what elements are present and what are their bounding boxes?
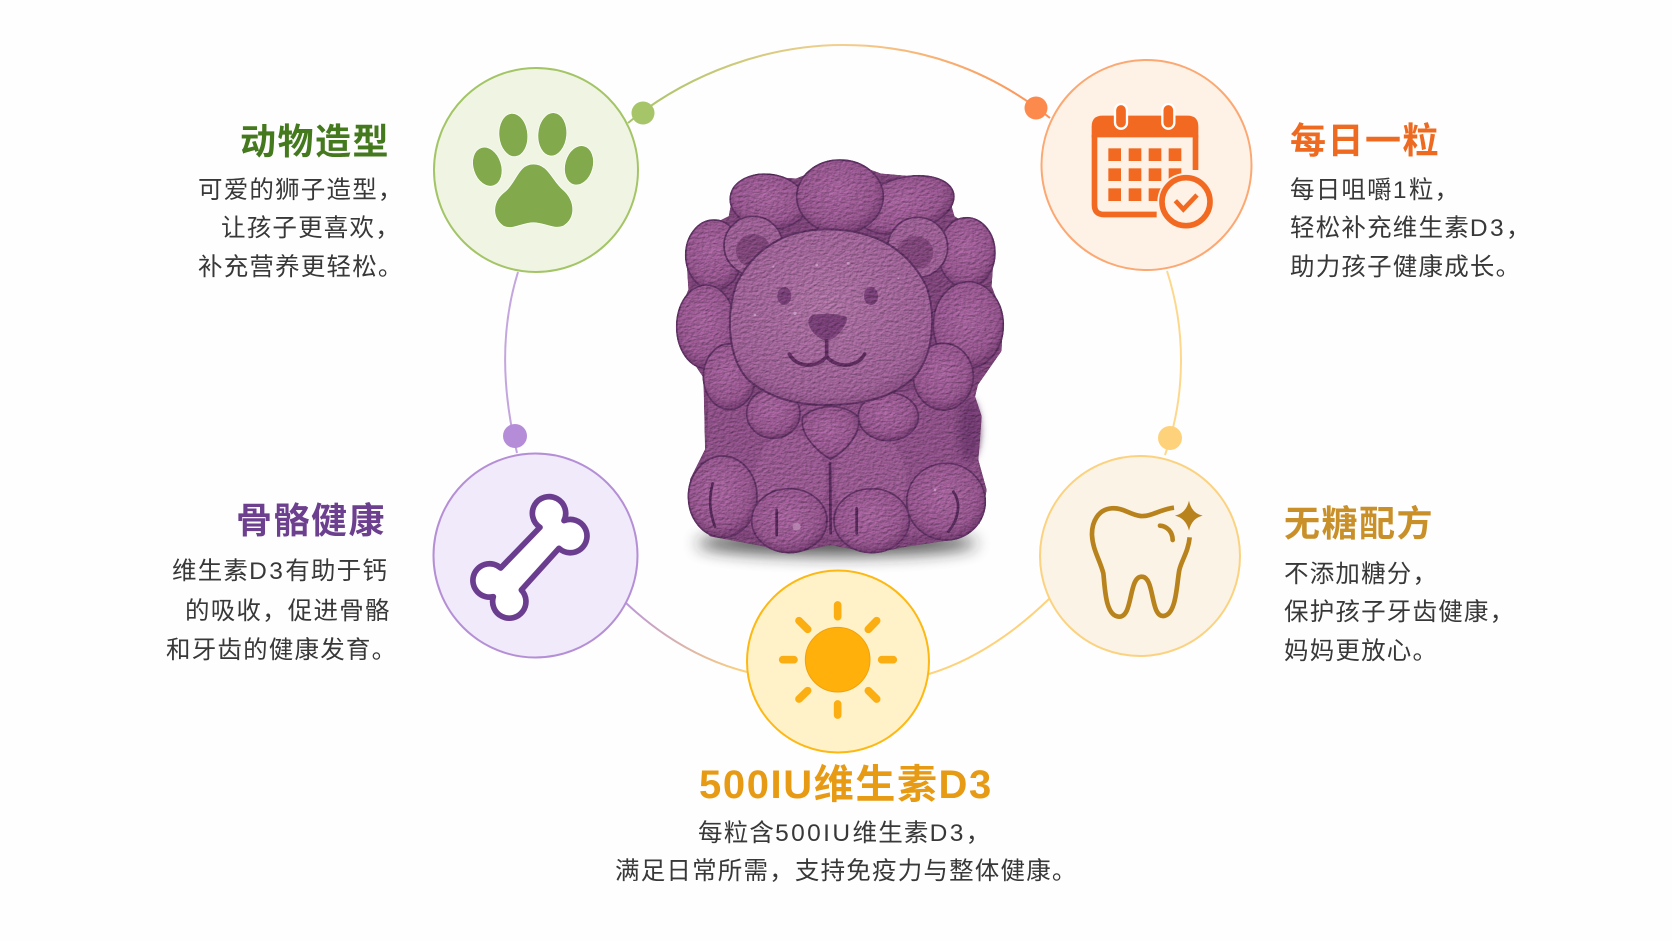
text block: 动物造型: 可爱的狮子造型， <box>198 177 404 204</box>
text block: 500IU维生素D3 <box>615 763 1078 885</box>
heading: 500IU维生素D3: 500IU维生素D3 <box>699 763 993 807</box>
feature circle: calendar <box>1042 60 1252 270</box>
heading: 每日一粒: 每日一粒 <box>1290 120 1440 161</box>
feature circle: tooth <box>1040 456 1240 656</box>
text block: 每日一粒: 轻松补充维生素D3， <box>1290 215 1532 242</box>
icon: calendar with check <box>1092 104 1215 230</box>
icon: tooth with sparkle <box>1092 501 1203 617</box>
feature circle: bone <box>434 454 638 658</box>
text block: 每日一粒 <box>1290 120 1532 281</box>
product image: purple lion tablet <box>677 160 1003 556</box>
feature circle: sun <box>747 570 929 752</box>
heading: 动物造型: 动物造型 <box>240 121 390 162</box>
heading: 无糖配方: 无糖配方 <box>1284 503 1434 544</box>
text block: 每日一粒: 每日咀嚼1粒， <box>1290 177 1460 204</box>
lion ground shadow <box>697 531 977 556</box>
text block: 动物造型 <box>198 121 404 281</box>
connector dot: yellow <box>1158 426 1182 450</box>
text block: 无糖配方: 妈妈更放心。 <box>1284 638 1438 665</box>
text block: 骨骼健康: 维生素D3有助于钙 <box>172 558 388 585</box>
feature circle: paw <box>434 68 638 272</box>
connecting ring arcs <box>505 45 1181 674</box>
connector dot: purple <box>503 424 527 448</box>
lion tablet body <box>677 160 1003 553</box>
text block: 500IU维生素D3: 满足日常所需，支持免疫力与整体健康。 <box>615 858 1078 885</box>
text block: 无糖配方: 不添加糖分， <box>1284 561 1438 588</box>
text block: 骨骼健康: 的吸收，促进骨骼 <box>185 598 391 625</box>
text block: 无糖配方: 保护孩子牙齿健康， <box>1284 599 1515 626</box>
text block: 每日一粒: 助力孩子健康成长。 <box>1290 254 1521 281</box>
text block: 无糖配方 <box>1284 503 1515 665</box>
text block: 骨骼健康 <box>166 500 397 664</box>
icon: sun <box>783 605 893 715</box>
icon: paw print <box>468 111 598 227</box>
text block: 动物造型: 让孩子更喜欢， <box>221 215 401 242</box>
connector dot: orange <box>1024 96 1048 120</box>
icon: bone <box>473 497 587 618</box>
connector dot: green <box>632 102 654 124</box>
text block: 500IU维生素D3: 每粒含500IU维生素D3， <box>698 820 991 847</box>
lion highlight specks <box>754 262 936 531</box>
heading: 骨骼健康: 骨骼健康 <box>236 500 386 541</box>
text block: 动物造型: 补充营养更轻松。 <box>198 254 404 281</box>
text block: 骨骼健康: 和牙齿的健康发育。 <box>166 637 397 664</box>
